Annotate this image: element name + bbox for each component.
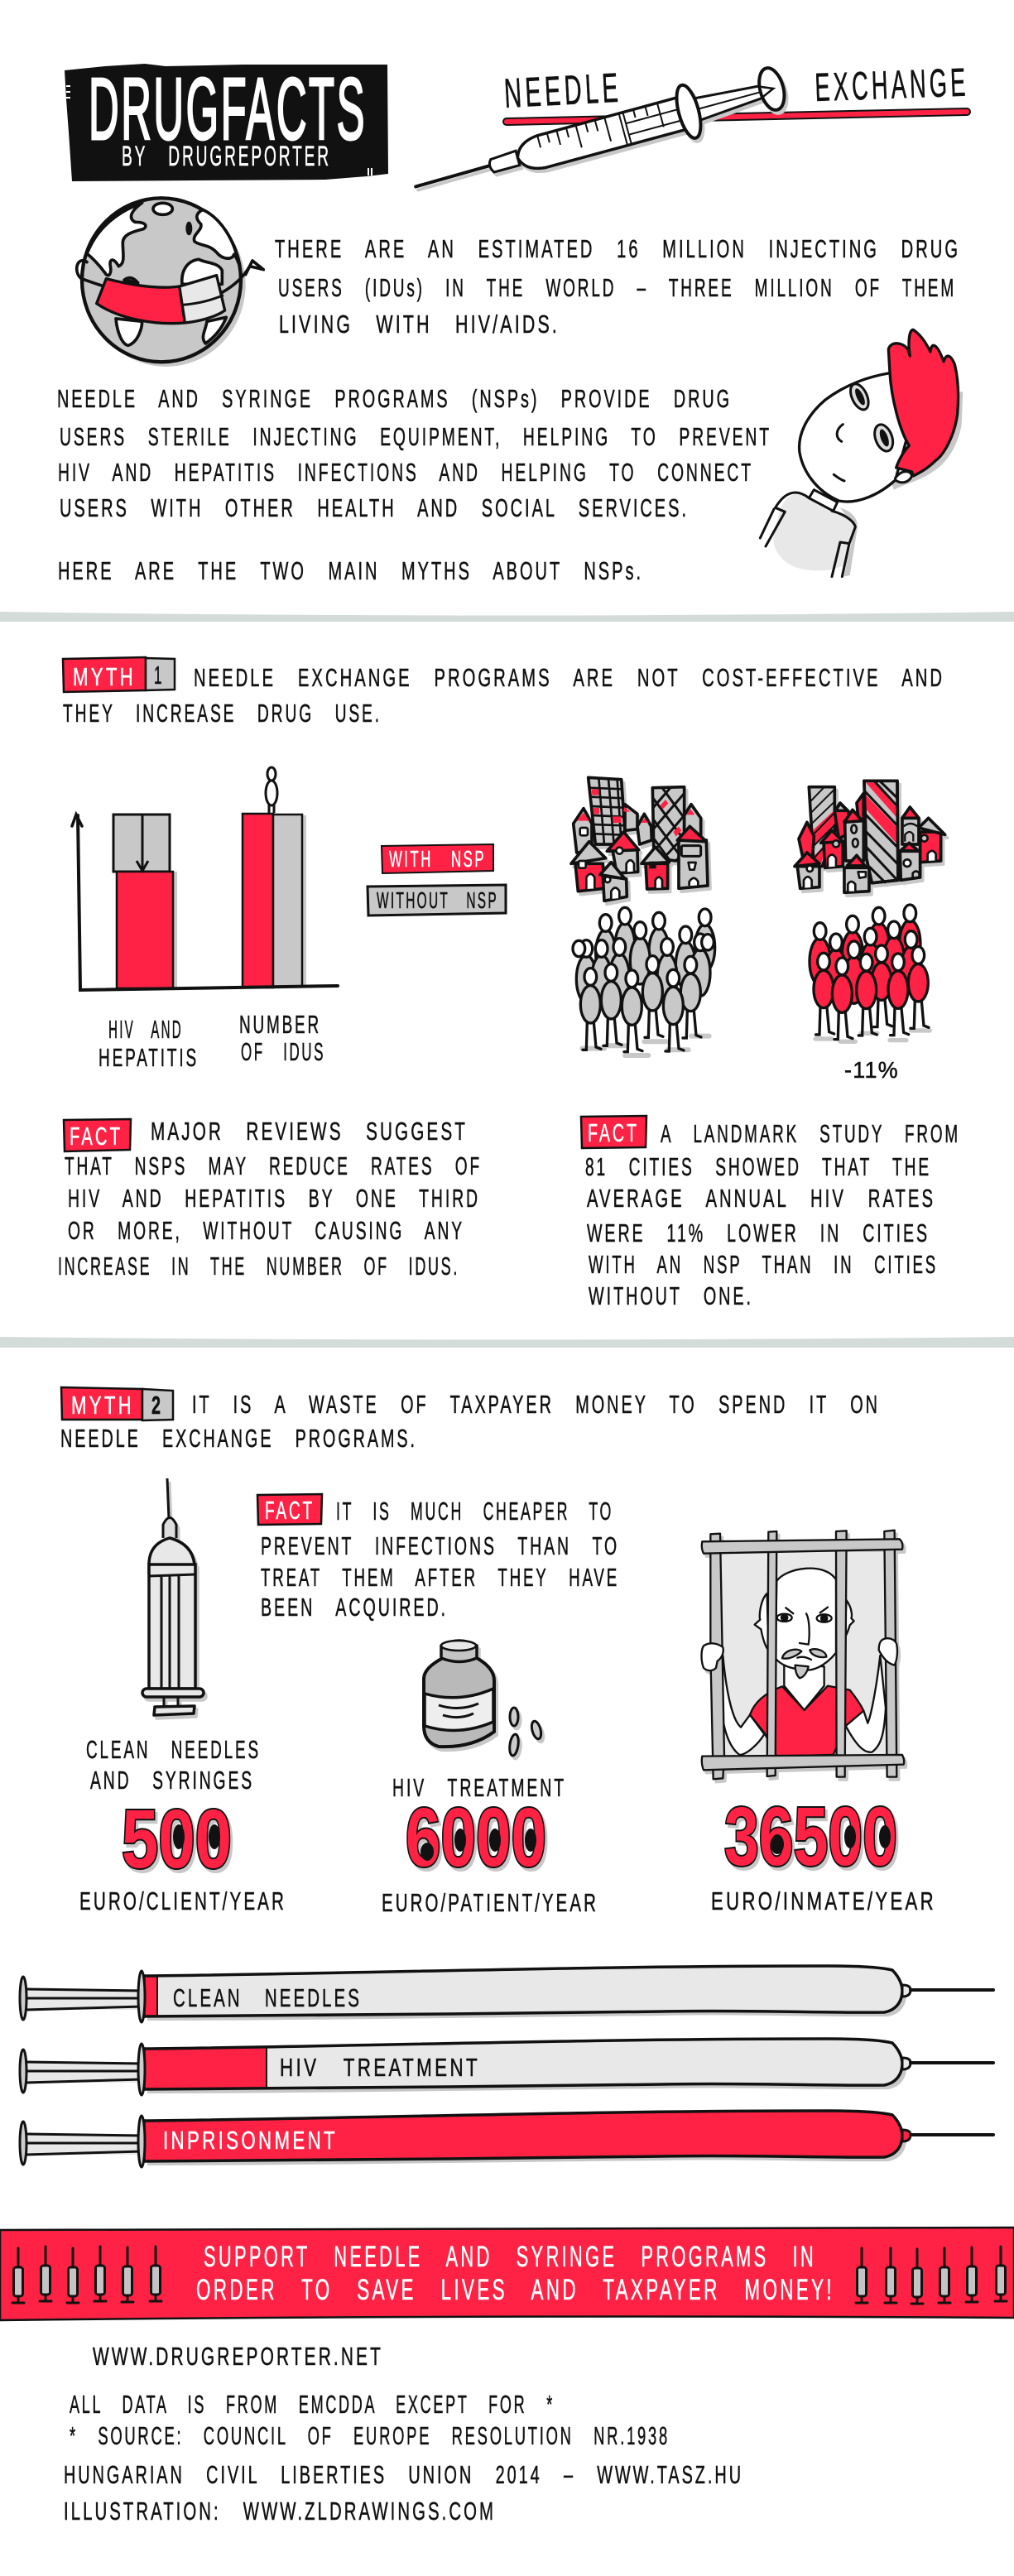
heading: Needle Exchange: NEEDLE [503,65,622,117]
fact 1 label [64,1119,131,1151]
text block: what needle and syringe programs do [57,384,771,585]
cost: imprisonment: 36500 [724,1790,897,1883]
icon: large syringe [408,60,790,212]
myth 1 label: MYTH [73,662,136,691]
label: minus 11 percent: -11% [844,1057,899,1083]
chart axis labels: HIV AND [108,1015,183,1044]
text block: myth 1 statement [63,663,944,728]
icon: prisoner behind bars [701,1531,904,1779]
fact 3 label [257,1494,322,1525]
text block: what needle and syringe programs do: USERS WITH OTHER HEALTH AND SOCIAL SERVICES. [60,493,689,522]
icon: city with NSP, grid and lattice towers [571,777,708,901]
legend: without NSP [368,885,506,916]
myth 2 label: MYTH [71,1391,134,1420]
footer credits [64,2342,743,2526]
footer credits: ALL DATA IS FROM EMCDDA EXCEPT FOR * [70,2390,555,2419]
text block: fact 1: THAT NSPS MAY REDUCE RATES OF [65,1151,482,1180]
icon: red-haired person looking up [760,329,963,577]
icon: crowd in red, with NSP [810,905,930,1041]
icon: person standing on bar [266,767,277,813]
cost: clean needles: AND SYRINGES [90,1766,254,1795]
text block: fact 3: PREVENT INFECTIONS THAN TO [261,1531,619,1560]
cost: clean needles: EURO/CLIENT/YEAR [79,1886,286,1915]
legend: with NSP: WITH NSP [389,846,486,872]
chart axis labels: OF IDUS [241,1037,325,1066]
title block: Drugfacts by Drugreporter: DRUGFACTS [89,60,367,158]
cost: HIV treatment: 6000 [406,1791,546,1884]
cost: imprisonment [711,1790,936,1915]
text block: fact 3: IT IS MUCH CHEAPER TO [336,1497,613,1526]
fact 2 label: FACT [588,1118,639,1147]
syringe bar: imprisonment: INPRISONMENT [163,2126,338,2155]
myth 2 label [61,1387,173,1420]
syringe bar: imprisonment [20,2111,993,2167]
icon: medicine bottle and pills [424,1641,543,1757]
text block: fact 3: BEEN ACQUIRED. [261,1593,448,1622]
footer credits: WWW.DRUGREPORTER.NET [93,2342,383,2371]
legend: without NSP: WITHOUT NSP [377,887,498,913]
icon: globe wearing a face mask [77,198,263,367]
text block: fact 2 [585,1119,960,1310]
cost: clean needles [79,1735,286,1915]
text block: fact 1: INCREASE IN THE NUMBER OF IDUS. [58,1252,459,1281]
syringe bar: HIV treatment: HIV TREATMENT [280,2053,480,2082]
icons: row of small syringes, right [856,2247,1007,2304]
myth 2 label: 2 [151,1391,163,1420]
chart axis labels: HEPATITIS [99,1043,199,1072]
text block: what needle and syringe programs do: HERE ARE THE TWO MAIN MYTHS ABOUT NSPs. [58,556,643,585]
text block: fact 1 [58,1117,482,1281]
text block: fact 3: TREAT THEM AFTER THEY HAVE [261,1563,619,1592]
cost: HIV treatment [382,1773,598,1917]
fact 2 label [581,1116,646,1148]
footer credits: ILLUSTRATION: WWW.ZLDRAWINGS.COM [64,2497,496,2526]
syringe bar: clean needles: CLEAN NEEDLES [173,1983,362,2012]
myth 1 label: 1 [154,661,164,690]
syringe bar: HIV treatment [20,2035,993,2095]
legend: with NSP [382,844,493,873]
divider band 2 [0,1337,1014,1348]
text block: fact 1: HIV AND HEPATITIS BY ONE THIRD [68,1184,480,1213]
text block: myth 2 statement: NEEDLE EXCHANGE PROGRAMS. [60,1424,417,1453]
cost: HIV treatment: HIV TREATMENT [392,1773,566,1802]
text block: myth 2 statement [60,1390,880,1453]
text block: myth 1 statement: THEY INCREASE DRUG USE. [63,699,382,728]
title block: Drugfacts by Drugreporter [65,60,388,181]
bar chart: HIV and hepatitis, number of IDUs [72,767,338,990]
fact 3 label: FACT [265,1496,315,1525]
icon: city without NSP, hatched towers [795,781,945,892]
fact 1 label: FACT [70,1122,123,1151]
cost: HIV treatment: EURO/PATIENT/YEAR [382,1888,598,1917]
icons: row of small syringes, left [12,2247,161,2303]
icon: vertical syringe [142,1478,204,1715]
divider band 1 [0,612,1014,622]
cost: clean needles: CLEAN NEEDLES [86,1735,261,1764]
icon: crowd in gray, without NSP [573,907,715,1055]
syringe bar: clean needles [20,1962,993,2022]
cost: clean needles: 500 [122,1793,232,1886]
myth 1 label [63,657,175,692]
text block: fact 1: OR MORE, WITHOUT CAUSING ANY [68,1216,464,1245]
text block: fact 1: MAJOR REVIEWS SUGGEST [151,1117,468,1146]
text block: fact 2: WITHOUT ONE. [589,1281,753,1310]
title block: Drugfacts by Drugreporter: BY DRUGREPORTER [122,141,331,172]
text block: fact 3 [261,1497,619,1622]
chart axis labels [99,1010,325,1072]
chart axis labels: NUMBER [239,1010,321,1039]
text block: injecting drug users: LIVING WITH HIV/AIDS. [279,310,560,339]
call to action banner [0,2228,1014,2320]
heading: Needle Exchange [503,61,969,122]
text block: injecting drug users [275,234,960,339]
